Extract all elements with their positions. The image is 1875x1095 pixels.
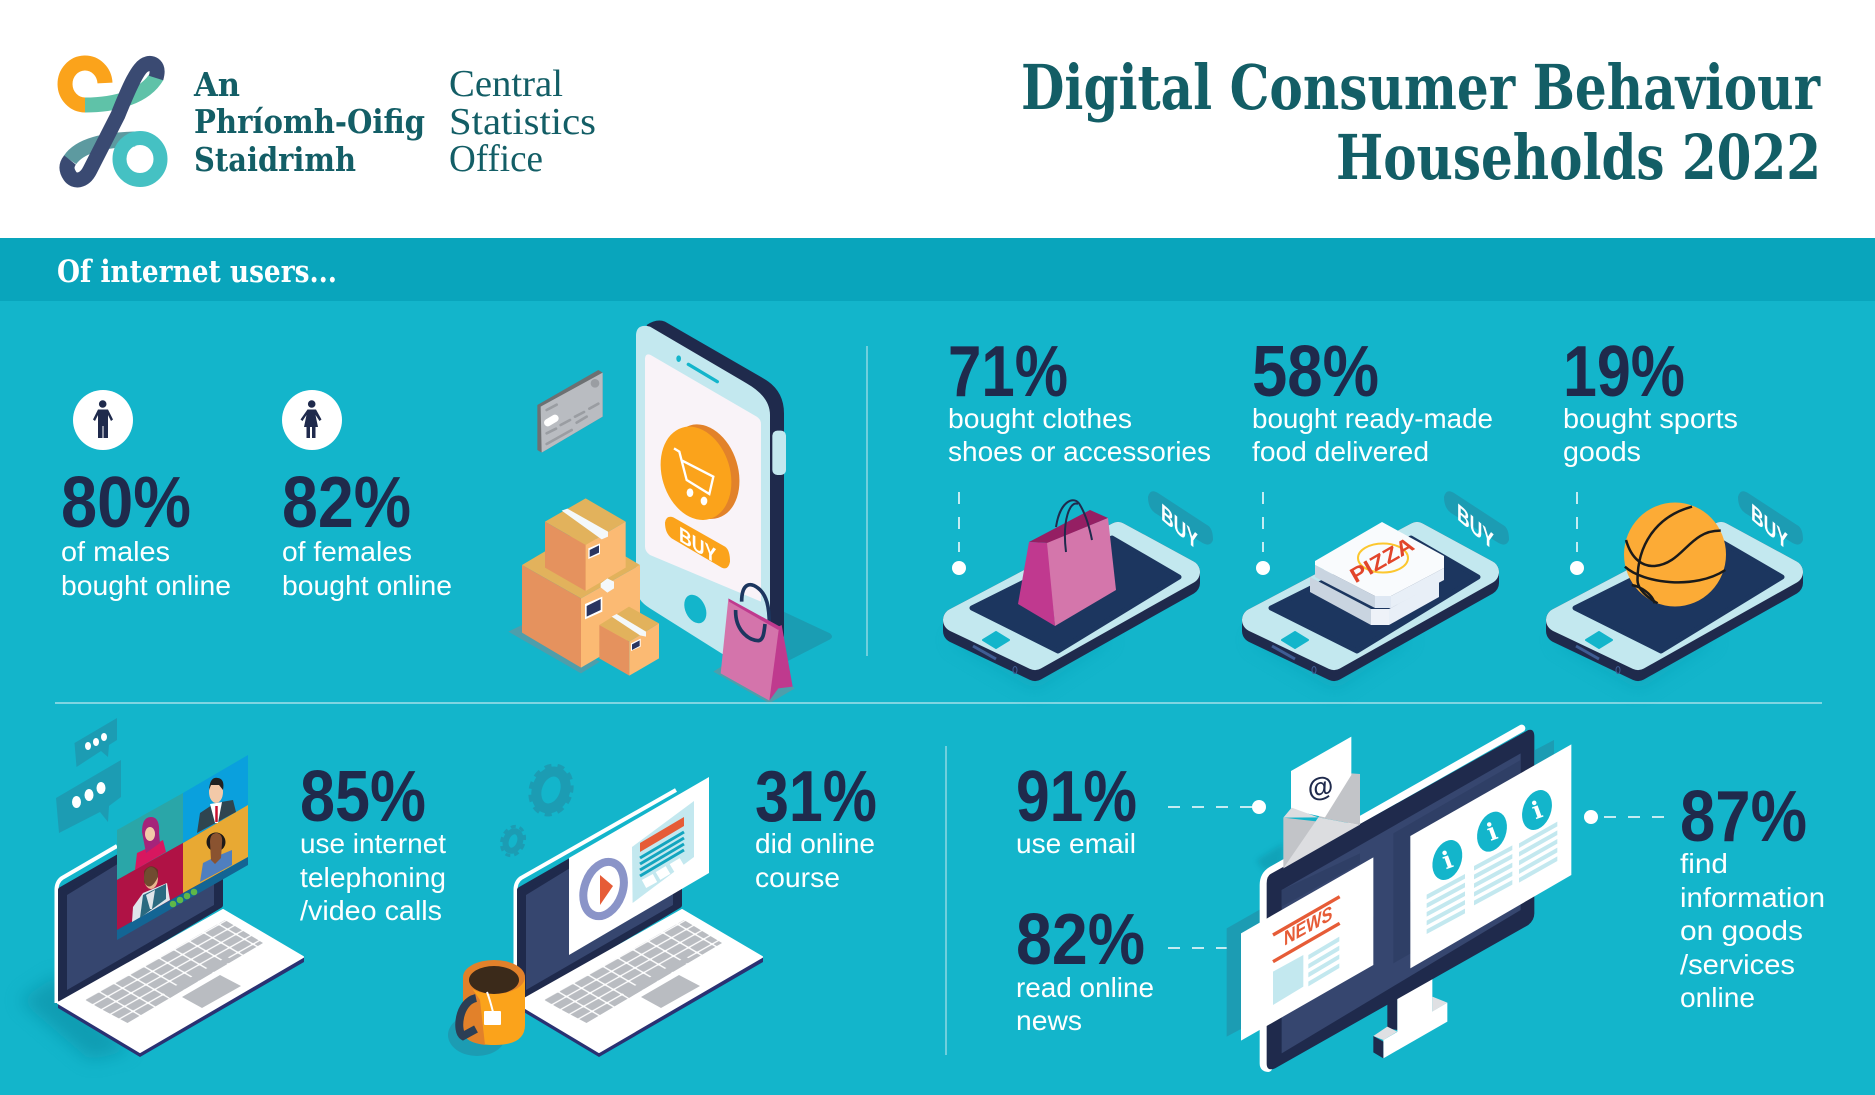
illustration: phone with pizza: PIZZA [1346, 533, 1418, 588]
logo wordmark Irish: Staidrimh [194, 140, 356, 179]
bag [742, 585, 769, 625]
section band [0, 238, 1875, 301]
logo wordmark Irish [193, 65, 425, 179]
stat: females: of females [282, 536, 412, 567]
stat: goods information: information [1680, 882, 1825, 913]
stat: food: 58% [1252, 332, 1379, 412]
divider horizontal [55, 702, 1822, 704]
illustration: phone with bag: BUY [1161, 497, 1198, 556]
illustration: phone with basketball: BUY [1751, 497, 1788, 556]
stat: video calls: 85% [300, 757, 426, 837]
stat: goods information: on goods [1680, 915, 1803, 946]
stat: males: 80% [61, 463, 191, 543]
envelope: @ [1305, 770, 1336, 804]
icon: male [73, 390, 133, 450]
title [1021, 51, 1821, 194]
divider vertical bottom [945, 746, 947, 1055]
illustration: laptop with online course [448, 760, 763, 1057]
stat: goods information: 87% [1680, 777, 1807, 857]
stat: goods information: /services [1680, 949, 1795, 980]
info sheet: i [1528, 795, 1546, 825]
stat: online news: 82% [1016, 900, 1145, 980]
phone screen [645, 354, 761, 602]
divider vertical top [866, 346, 868, 656]
stand [1387, 997, 1397, 1030]
illustration: phone with pizza: BUY [1457, 497, 1494, 556]
stat: video calls: use internet [300, 828, 446, 859]
info sheet: i [1483, 816, 1501, 847]
buy button [665, 517, 730, 568]
stat: females: bought online [282, 570, 452, 601]
stat: online news: read online [1016, 972, 1154, 1003]
stat: males: bought online [61, 570, 231, 601]
illustration: shopping phone with boxes: BUY [679, 521, 717, 569]
illustration: laptop with video call [20, 718, 304, 1060]
illustration: shopping phone with boxes [508, 321, 832, 703]
monitor [1263, 728, 1522, 1068]
stat: males [61, 390, 231, 601]
info sheet: i [1438, 845, 1457, 875]
logo wordmark Irish: An [193, 65, 240, 104]
gears [498, 760, 578, 859]
illustration: phone with pizza [1250, 491, 1509, 690]
stat: video calls: /video calls [300, 895, 442, 926]
stat: online course: 31% [755, 757, 877, 837]
stat: males: of males [61, 536, 170, 567]
band heading: Of internet users... [57, 254, 337, 290]
header background [0, 0, 1875, 238]
stat: sports: goods [1563, 436, 1641, 467]
stat: online course: did online [755, 828, 875, 859]
illustration: phone with bag [950, 491, 1213, 690]
stat: video calls: telephoning [300, 862, 446, 893]
stat: clothes: bought clothes [948, 403, 1132, 434]
connector: news [1168, 947, 1230, 949]
stat: sports [1563, 332, 1738, 467]
news sheet: NEWS [1284, 901, 1332, 951]
stat: food [1252, 332, 1493, 467]
stat: clothes: shoes or accessories [948, 436, 1211, 467]
logo wordmark English [449, 63, 596, 180]
connector: email [1168, 800, 1266, 814]
laptop [56, 846, 117, 1003]
logo wordmark English: Central [449, 63, 563, 105]
illustration: phone with basketball [1554, 491, 1803, 690]
stat: online course [755, 757, 877, 893]
phone face [636, 326, 770, 657]
stat: video calls [300, 757, 446, 926]
stat: online news [1016, 900, 1154, 1036]
stat: clothes: 71% [948, 332, 1068, 412]
stat: goods information: online [1680, 982, 1755, 1013]
stat: food: food delivered [1252, 436, 1429, 467]
phone body [647, 321, 784, 637]
stat: goods information [1680, 777, 1825, 1013]
connector: information [1584, 810, 1665, 824]
logo wordmark Irish: Phríomh-Oifig [194, 102, 425, 141]
stat: females: 82% [282, 463, 411, 543]
stat: email: use email [1016, 828, 1136, 859]
stat: food: bought ready-made [1252, 403, 1493, 434]
illustration: monitor with news, email and info [1227, 728, 1571, 1069]
icon: female [282, 390, 342, 450]
stat: email [1016, 757, 1137, 859]
info sheet [1410, 744, 1571, 968]
stat: online course: course [755, 862, 840, 893]
stat: females [282, 390, 452, 601]
stat: sports: bought sports [1563, 403, 1738, 434]
news sheet [1241, 857, 1373, 1041]
stat: goods information: find [1680, 848, 1728, 879]
chat bubbles [56, 718, 121, 833]
stat: online news: news [1016, 1005, 1082, 1036]
laptop [516, 790, 676, 1003]
envelope [1283, 737, 1360, 868]
card [537, 370, 603, 453]
stat: sports: 19% [1563, 332, 1685, 412]
cart button [657, 416, 751, 528]
boxes [522, 530, 640, 598]
course sheet [569, 777, 709, 955]
logo wordmark English: Office [449, 138, 543, 180]
mug [448, 960, 525, 1056]
logo [65, 63, 160, 180]
stat: clothes [948, 332, 1211, 467]
stat: email: 91% [1016, 757, 1137, 837]
video call panel [117, 755, 248, 940]
logo wordmark English: Statistics [449, 101, 596, 143]
